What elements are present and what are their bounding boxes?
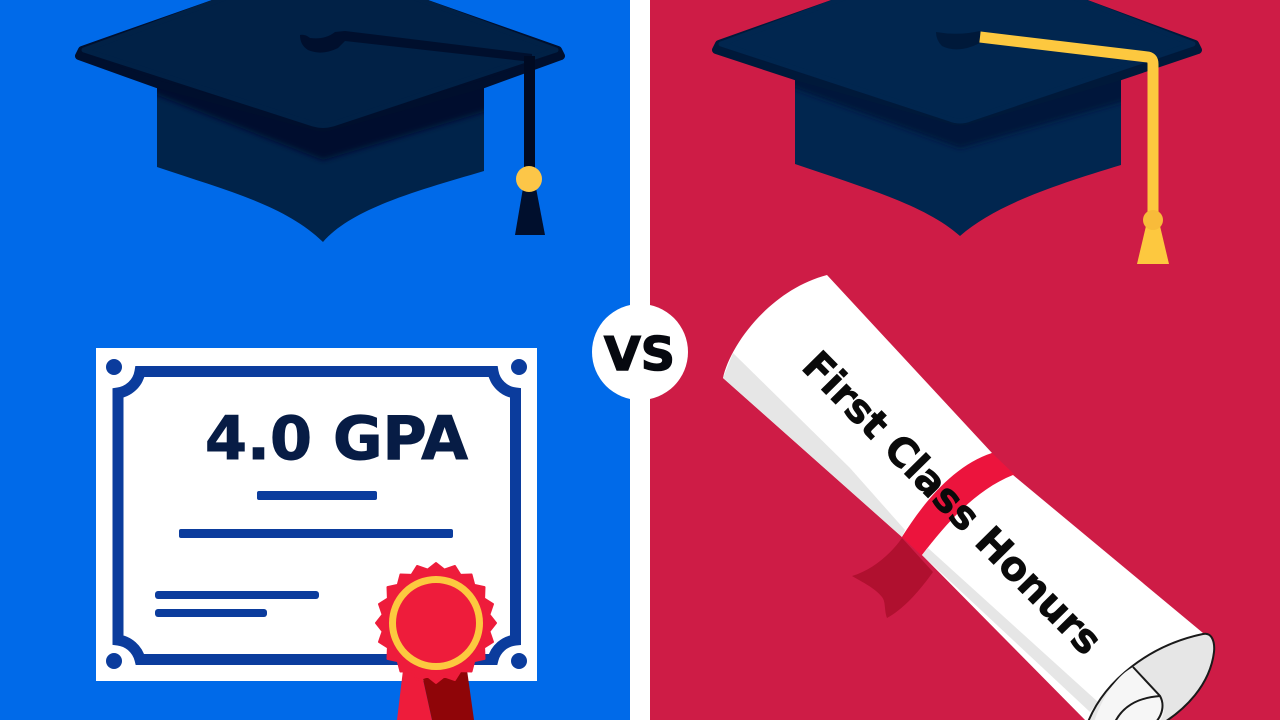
heading: 4.0 GPA: 4.0 GPA (205, 404, 469, 474)
icon: left graduation cap (79, 0, 561, 242)
panel: right red background (650, 0, 1280, 720)
certificate text lines (155, 491, 453, 617)
scroll lower section (922, 475, 1203, 720)
panel: left blue background (0, 0, 630, 720)
badge: VS circle: VS (604, 327, 675, 381)
panel: diploma scroll (723, 275, 1214, 720)
certificate border frame (118, 372, 516, 660)
panel: certificate (96, 348, 537, 720)
scroll upper section (723, 275, 992, 537)
icon: right graduation cap (716, 0, 1198, 264)
badge: VS circle (592, 304, 688, 400)
scroll ribbon band (902, 453, 1015, 556)
certificate corner dots (106, 359, 527, 669)
scroll ribbon tail (852, 538, 933, 618)
scroll rolled end (1088, 634, 1214, 720)
icon: red rosette seal (376, 563, 496, 720)
scroll title: First Class Honurs: First Class Honurs (793, 343, 1111, 664)
